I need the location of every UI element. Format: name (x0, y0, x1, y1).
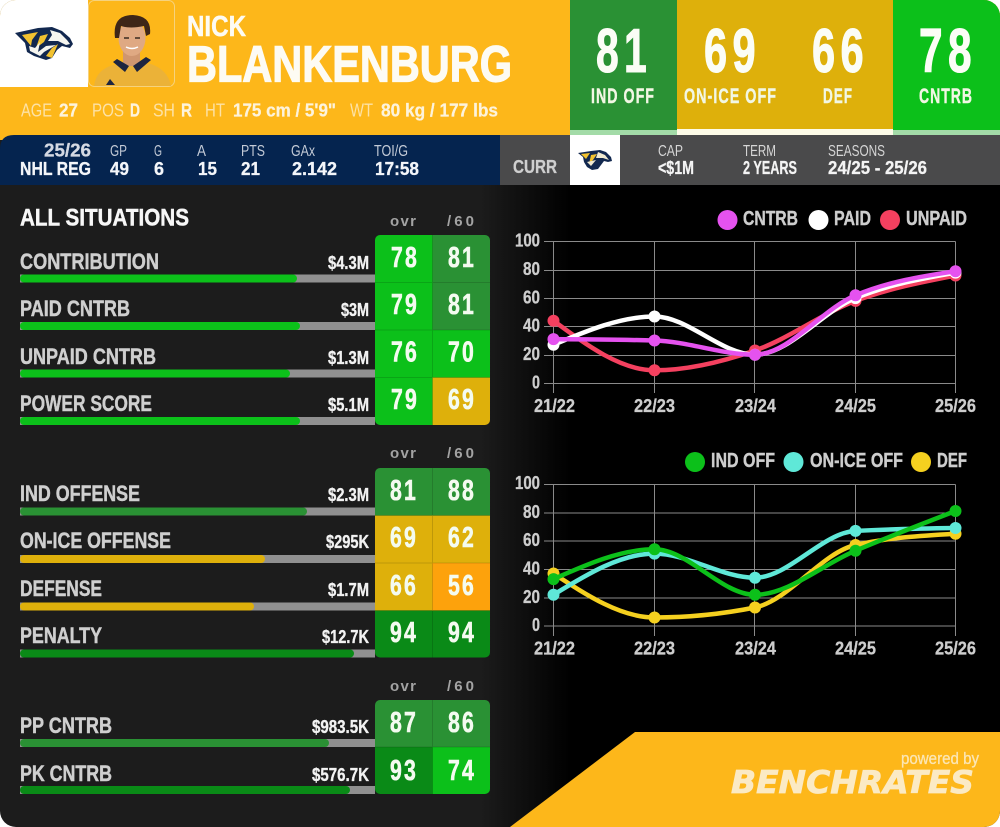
season stats bar: 25/26 (44, 140, 91, 160)
row: power score: POWER SCORE (20, 391, 152, 416)
y axis labels (515, 473, 540, 635)
tile: on-ice off: ON-ICE OFF (684, 85, 777, 108)
season stats bar: 21 (241, 158, 260, 179)
row: unpaid cntrb: $1.3M (328, 348, 369, 368)
line: paid (548, 267, 962, 361)
contract bar: 2 YEARS (743, 157, 797, 178)
y axis labels: 100 (515, 473, 540, 493)
row: on-ice offense: $295K (326, 532, 369, 552)
contract bar: CURR (513, 156, 557, 177)
x axis labels (534, 398, 976, 412)
overall rating tiles (570, 0, 1000, 135)
row: contribution (20, 246, 474, 282)
rating cells (375, 700, 490, 794)
player bio: 175 cm / 5'9" (233, 100, 336, 120)
season stats bar: A (197, 143, 206, 160)
line: on-ice off (548, 522, 962, 601)
y axis labels: 20 (523, 587, 540, 607)
y axis labels: 60 (523, 288, 540, 308)
contract bar: 24/25 - 25/26 (828, 157, 927, 178)
season stats bar: NHL REG (20, 158, 91, 179)
season stats bar: TOI/G (374, 143, 408, 160)
row: pk cntrb: 93 (390, 755, 418, 787)
player bio: AGE (21, 100, 52, 120)
legend: IND OFF (711, 450, 775, 472)
season stats bar: 15 (198, 158, 217, 179)
row: pk cntrb: PK CNTRB (20, 761, 112, 786)
row: power score: $5.1M (328, 395, 369, 415)
row: paid cntrb: 81 (448, 289, 476, 321)
tile: ind off (592, 28, 654, 104)
row: power score: 69 (448, 384, 476, 416)
footer brand panel (510, 732, 1000, 827)
row: on-ice offense (20, 526, 474, 563)
row: penalty: PENALTY (20, 623, 102, 648)
player bio: HT (205, 100, 225, 120)
row: pp cntrb: PP CNTRB (20, 713, 112, 738)
tile: cntrb: CNTRB (919, 85, 973, 108)
column headers: /60 (447, 678, 474, 695)
row: defense: $1.7M (328, 580, 369, 600)
column headers (390, 215, 474, 226)
row: defense: 56 (448, 570, 476, 602)
y axis labels: 80 (523, 502, 540, 522)
season stats bar: GP (110, 143, 127, 160)
x axis labels: 21/22 (534, 638, 575, 658)
player bio (21, 102, 498, 121)
row: on-ice offense: ON-ICE OFFENSE (20, 528, 171, 553)
row: defense (20, 574, 474, 610)
x axis labels: 23/24 (735, 396, 776, 416)
row: ind offense: 88 (448, 475, 476, 507)
tile: cntrb (919, 28, 972, 104)
row: pk cntrb: $576.7K (312, 765, 369, 785)
row: ind offense (20, 480, 474, 516)
y axis labels: 0 (532, 372, 540, 392)
row: contribution: CONTRIBUTION (20, 249, 159, 274)
row: unpaid cntrb: 76 (391, 336, 419, 368)
x axis labels: 25/26 (935, 638, 976, 658)
header band (0, 0, 1000, 140)
row: unpaid cntrb: UNPAID CNTRB (20, 344, 156, 369)
rating cells (375, 235, 490, 425)
x axis labels: 22/23 (634, 396, 675, 416)
row: ind offense: IND OFFENSE (20, 481, 140, 506)
column headers: ovr (390, 213, 416, 230)
contract bar (500, 135, 1000, 185)
row: pp cntrb: 86 (448, 707, 476, 739)
column headers: ovr (390, 445, 416, 462)
y axis labels (515, 230, 540, 392)
row: penalty: 94 (390, 617, 418, 649)
x axis labels: 24/25 (835, 396, 876, 416)
line: unpaid (548, 270, 962, 376)
row: unpaid cntrb (20, 341, 474, 378)
column headers: /60 (447, 213, 474, 230)
season stats bar: 2.142 (292, 158, 337, 179)
row: penalty: $12.7K (322, 627, 369, 647)
y axis labels: 80 (523, 259, 540, 279)
x axis labels: 25/26 (935, 396, 976, 416)
row: penalty (20, 622, 474, 658)
player name: BLANKENBURG (187, 36, 512, 92)
legend (685, 450, 967, 472)
y axis labels: 20 (523, 344, 540, 364)
player bio: D (130, 100, 140, 120)
row: on-ice offense: 62 (448, 522, 476, 554)
player bio: 80 kg / 177 lbs (381, 100, 498, 120)
y axis labels: 40 (523, 558, 540, 578)
heading: all situations: ALL SITUATIONS (20, 204, 189, 232)
legend: DEF (937, 450, 967, 472)
powered by: powered by (901, 749, 979, 768)
player bio: SH (153, 100, 175, 120)
player bio: WT (350, 100, 373, 120)
panel: all situations ratings (20, 213, 490, 425)
row: pp cntrb: $983.5K (312, 717, 369, 737)
x axis labels: 22/23 (634, 638, 675, 658)
row: pk cntrb (20, 760, 474, 794)
y axis labels: 100 (515, 230, 540, 250)
row: contribution: $4.3M (328, 253, 369, 273)
tile: def: DEF (823, 85, 853, 108)
row: defense: 66 (390, 570, 418, 602)
rating cells (375, 468, 490, 658)
row: contribution: 78 (391, 242, 419, 274)
line: ind off (548, 505, 962, 601)
tile: ind off: IND OFF (591, 85, 655, 108)
row: ind offense: $2.3M (328, 485, 369, 505)
row: defense: DEFENSE (20, 576, 102, 601)
chart: contribution trend (515, 208, 976, 416)
season stats bar: PTS (241, 143, 265, 160)
tile: on-ice off: 69 (704, 17, 761, 86)
column headers: ovr (390, 678, 416, 695)
row: paid cntrb: PAID CNTRB (20, 296, 130, 321)
y axis labels: 60 (523, 530, 540, 550)
tile: def (813, 28, 862, 104)
season stats bar: 17:58 (375, 158, 419, 179)
column headers: /60 (447, 445, 474, 462)
row: contribution: 81 (448, 242, 476, 274)
row: pp cntrb (20, 712, 474, 747)
season stats bar: 6 (154, 158, 164, 179)
row: power score (20, 388, 474, 425)
legend: UNPAID (906, 208, 967, 230)
chart: offense and defense trend (515, 450, 976, 658)
x axis labels (534, 638, 976, 658)
row: ind offense: 81 (390, 475, 418, 507)
tile: def: 66 (812, 17, 869, 86)
contract bar: TERM (743, 143, 776, 160)
tile: ind off: 81 (596, 17, 652, 86)
y axis labels: 40 (523, 316, 540, 336)
brand wordmark: BENCHRATES (731, 765, 974, 801)
legend: ON-ICE OFF (810, 450, 903, 472)
row: on-ice offense: 69 (390, 522, 418, 554)
line: cntrb (548, 265, 962, 361)
row: penalty: 94 (448, 617, 476, 649)
player name: NICK (187, 11, 246, 43)
season stats bar: GAx (291, 143, 315, 160)
x axis labels: 23/24 (735, 638, 776, 658)
y axis labels: 0 (532, 615, 540, 635)
line: def (548, 528, 962, 624)
row: unpaid cntrb: 70 (448, 336, 476, 368)
panel: offense and defense ratings (20, 445, 490, 658)
row: power score: 79 (391, 384, 419, 416)
season stats bar (0, 135, 500, 185)
tile: on-ice off (684, 28, 776, 104)
season stats bar: 49 (110, 158, 129, 179)
x axis labels: 21/22 (534, 396, 575, 416)
x axis labels: 24/25 (835, 638, 876, 658)
player name (188, 16, 510, 83)
row: paid cntrb: $3M (341, 300, 369, 320)
player bio: R (181, 100, 192, 120)
row: paid cntrb: 79 (391, 289, 419, 321)
legend (718, 208, 967, 230)
column headers (390, 680, 474, 691)
legend: PAID (834, 208, 871, 230)
player bio: 27 (59, 100, 78, 120)
panel: special teams ratings (20, 678, 490, 794)
column headers (390, 447, 474, 458)
legend: CNTRB (743, 208, 798, 230)
row: pk cntrb: 74 (448, 755, 476, 787)
season stats bar: G (154, 143, 162, 160)
contract team logo (570, 135, 620, 185)
player bio: POS (92, 100, 124, 120)
contract bar: CAP (658, 143, 683, 160)
row: paid cntrb (20, 294, 474, 330)
row: pp cntrb: 87 (390, 707, 418, 739)
contract bar: <$1M (658, 157, 694, 178)
contract bar: SEASONS (828, 143, 885, 160)
player photo (88, 0, 174, 86)
team logo box (0, 0, 88, 87)
